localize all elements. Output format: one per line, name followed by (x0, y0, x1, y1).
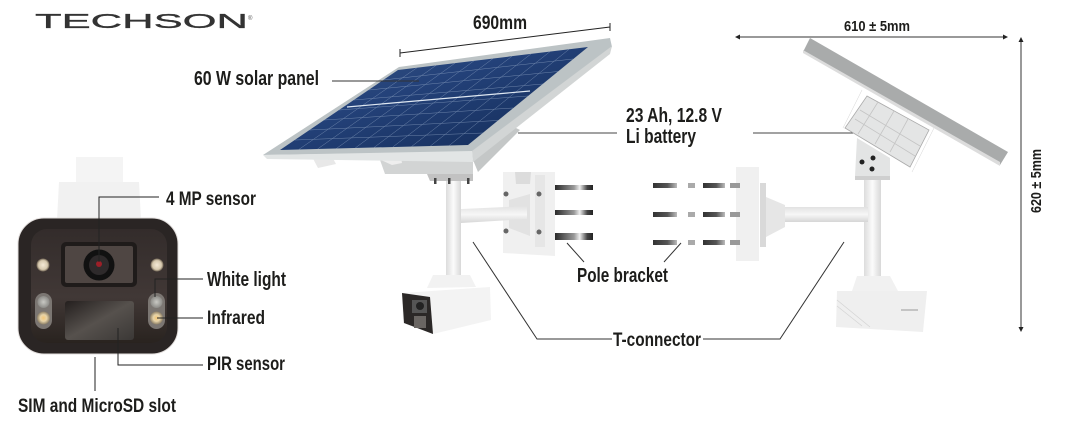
camera hood (427, 275, 476, 288)
right LED pill (148, 293, 165, 329)
side straps (653, 183, 740, 245)
label: 610 dimension: 610 ± 5mm (844, 18, 910, 35)
side arm (767, 207, 868, 222)
lens module (61, 242, 137, 287)
side plate (736, 167, 759, 261)
left LED pill (35, 293, 52, 329)
label: 4 MP sensor: 4 MP sensor (166, 189, 256, 210)
pole (446, 180, 461, 276)
label: 620 dimension: 620 ± 5mm (1028, 149, 1045, 213)
camera body (402, 287, 491, 334)
panel frame (263, 38, 612, 162)
logo: Techson: ® (248, 15, 253, 22)
label: battery: 23 Ah, 12.8 V (626, 105, 723, 127)
label: infrared: Infrared (207, 308, 265, 329)
label: pole bracket (567, 243, 681, 287)
camera mount (57, 157, 141, 220)
PIR window (65, 301, 134, 340)
logo: Techson: TECHSON (35, 11, 248, 33)
side flange (766, 197, 785, 237)
label: 690mm dimension (400, 13, 610, 57)
label: T-connector (473, 242, 844, 351)
pole bracket plate (503, 172, 555, 256)
panel underside (310, 125, 520, 184)
tilt mount (855, 138, 890, 180)
label: white light: White light (207, 269, 286, 291)
side view: solar camera unit (653, 38, 1008, 332)
side hood (852, 276, 898, 291)
small LEDs (36, 258, 164, 272)
label: solar panel: 60 W solar panel (194, 68, 319, 90)
label: PIR sensor: PIR sensor (207, 354, 285, 375)
label: 620 dimension (1018, 37, 1045, 332)
side camera body (836, 291, 927, 332)
label: SIM and MicroSD slot: SIM and MicroSD slot (18, 396, 177, 417)
label: 610 dimension (735, 18, 1008, 40)
side pole (864, 180, 881, 277)
label: 690mm dimension: 690mm (473, 13, 527, 34)
side panel edge (803, 38, 1008, 166)
camera front close-up (18, 157, 178, 354)
label: battery (518, 105, 871, 148)
label: pole bracket: Pole bracket (577, 265, 668, 287)
pole arm (461, 206, 527, 223)
label: battery: Li battery (626, 126, 697, 148)
solar cells (280, 47, 588, 150)
camera housing (18, 218, 178, 354)
callouts: camera front (95, 197, 203, 391)
label: T-connector: T-connector (613, 330, 701, 351)
strap bands (555, 185, 593, 240)
front view: solar camera unit (263, 38, 612, 334)
logo: Techson (35, 11, 253, 33)
battery pack (843, 90, 934, 172)
